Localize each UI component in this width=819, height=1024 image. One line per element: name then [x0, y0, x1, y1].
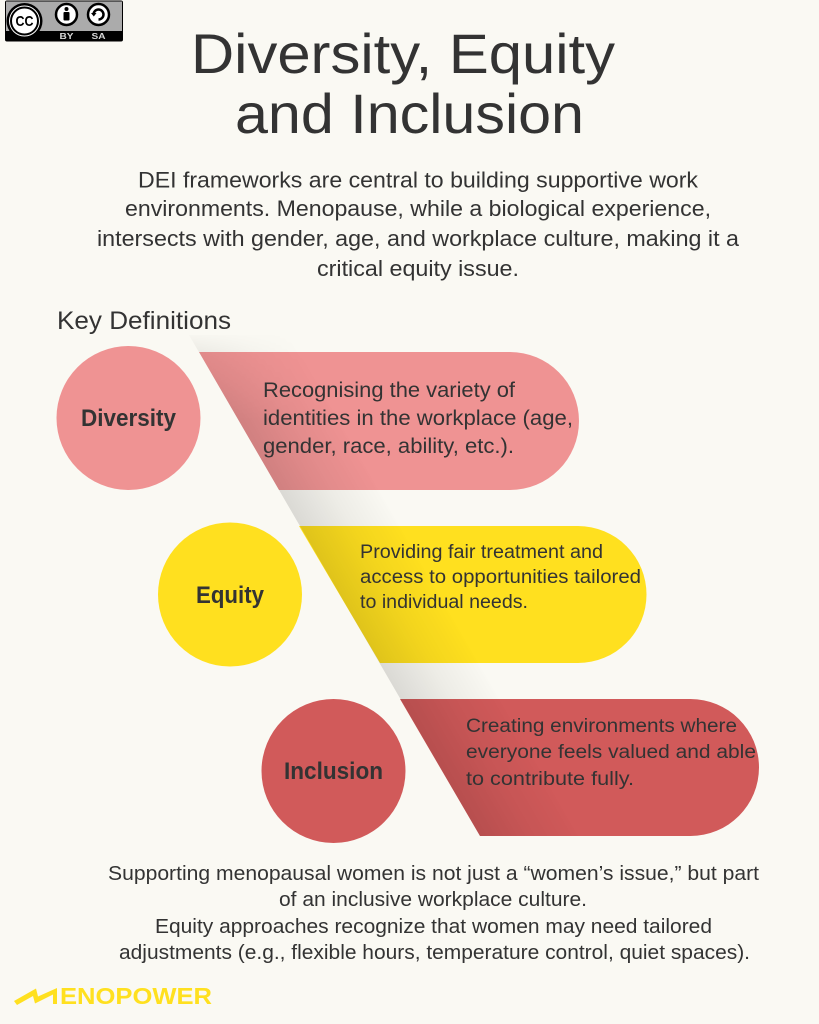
text: equity definition: access to opportunities tailored [360, 567, 641, 588]
icon circle: equity: Equity [196, 582, 265, 609]
icon: creative commons BY-SA badge: SA [92, 32, 106, 41]
title: Diversity, Equity [191, 22, 615, 85]
panel: equity banner [299, 526, 646, 663]
intro text block: DEI frameworks are central to building supportive work [138, 168, 699, 192]
intro text block [97, 168, 740, 281]
title [191, 22, 615, 145]
icon circle: diversity [56, 346, 200, 490]
intro text block: environments. Menopause, while a biological experience, [125, 196, 711, 221]
text: inclusion definition: Creating environments where [466, 716, 737, 737]
panel: inclusion banner [400, 699, 759, 836]
heading: key definitions: Key Definitions [57, 307, 231, 335]
intro text block: critical equity issue. [317, 256, 519, 281]
closing text block: Supporting menopausal women is not just a “women’s issue,” but part [108, 863, 759, 885]
icon circle: inclusion [262, 699, 406, 843]
text: diversity definition: Recognising the variety of [263, 379, 515, 402]
logo: menopower [14, 983, 212, 1009]
closing text block [108, 863, 759, 964]
text: diversity definition [263, 379, 573, 458]
text: diversity definition: identities in the workplace (age, [263, 407, 573, 430]
icon: creative commons BY-SA badge [5, 0, 123, 42]
logo: menopower: ENOPOWER [60, 983, 212, 1009]
closing text block: of an inclusive workplace culture. [279, 889, 587, 911]
icon: creative commons BY-SA badge: BY [60, 32, 74, 41]
text: equity definition [360, 542, 641, 613]
text: diversity definition: gender, race, ability, etc.). [263, 435, 514, 458]
icon: creative commons BY-SA badge: CC [16, 13, 34, 30]
diagonal fold shadow [194, 343, 544, 836]
closing text block: adjustments (e.g., flexible hours, temperature control, quiet spaces). [119, 942, 750, 964]
icon circle: diversity: Diversity [81, 405, 177, 432]
text: inclusion definition: to contribute fully. [466, 769, 634, 790]
icon circle: equity [158, 522, 302, 666]
text: inclusion definition [466, 716, 756, 790]
text: inclusion definition: everyone feels valued and able [466, 742, 756, 763]
icon circle: inclusion: Inclusion [284, 758, 383, 785]
closing text block: Equity approaches recognize that women may need tailored [155, 916, 712, 938]
title: and Inclusion [235, 82, 584, 145]
text: equity definition: Providing fair treatment and [360, 542, 603, 563]
panel: diversity banner [199, 352, 579, 490]
text: equity definition: to individual needs. [360, 592, 528, 613]
intro text block: intersects with gender, age, and workplace culture, making it a [97, 226, 740, 251]
